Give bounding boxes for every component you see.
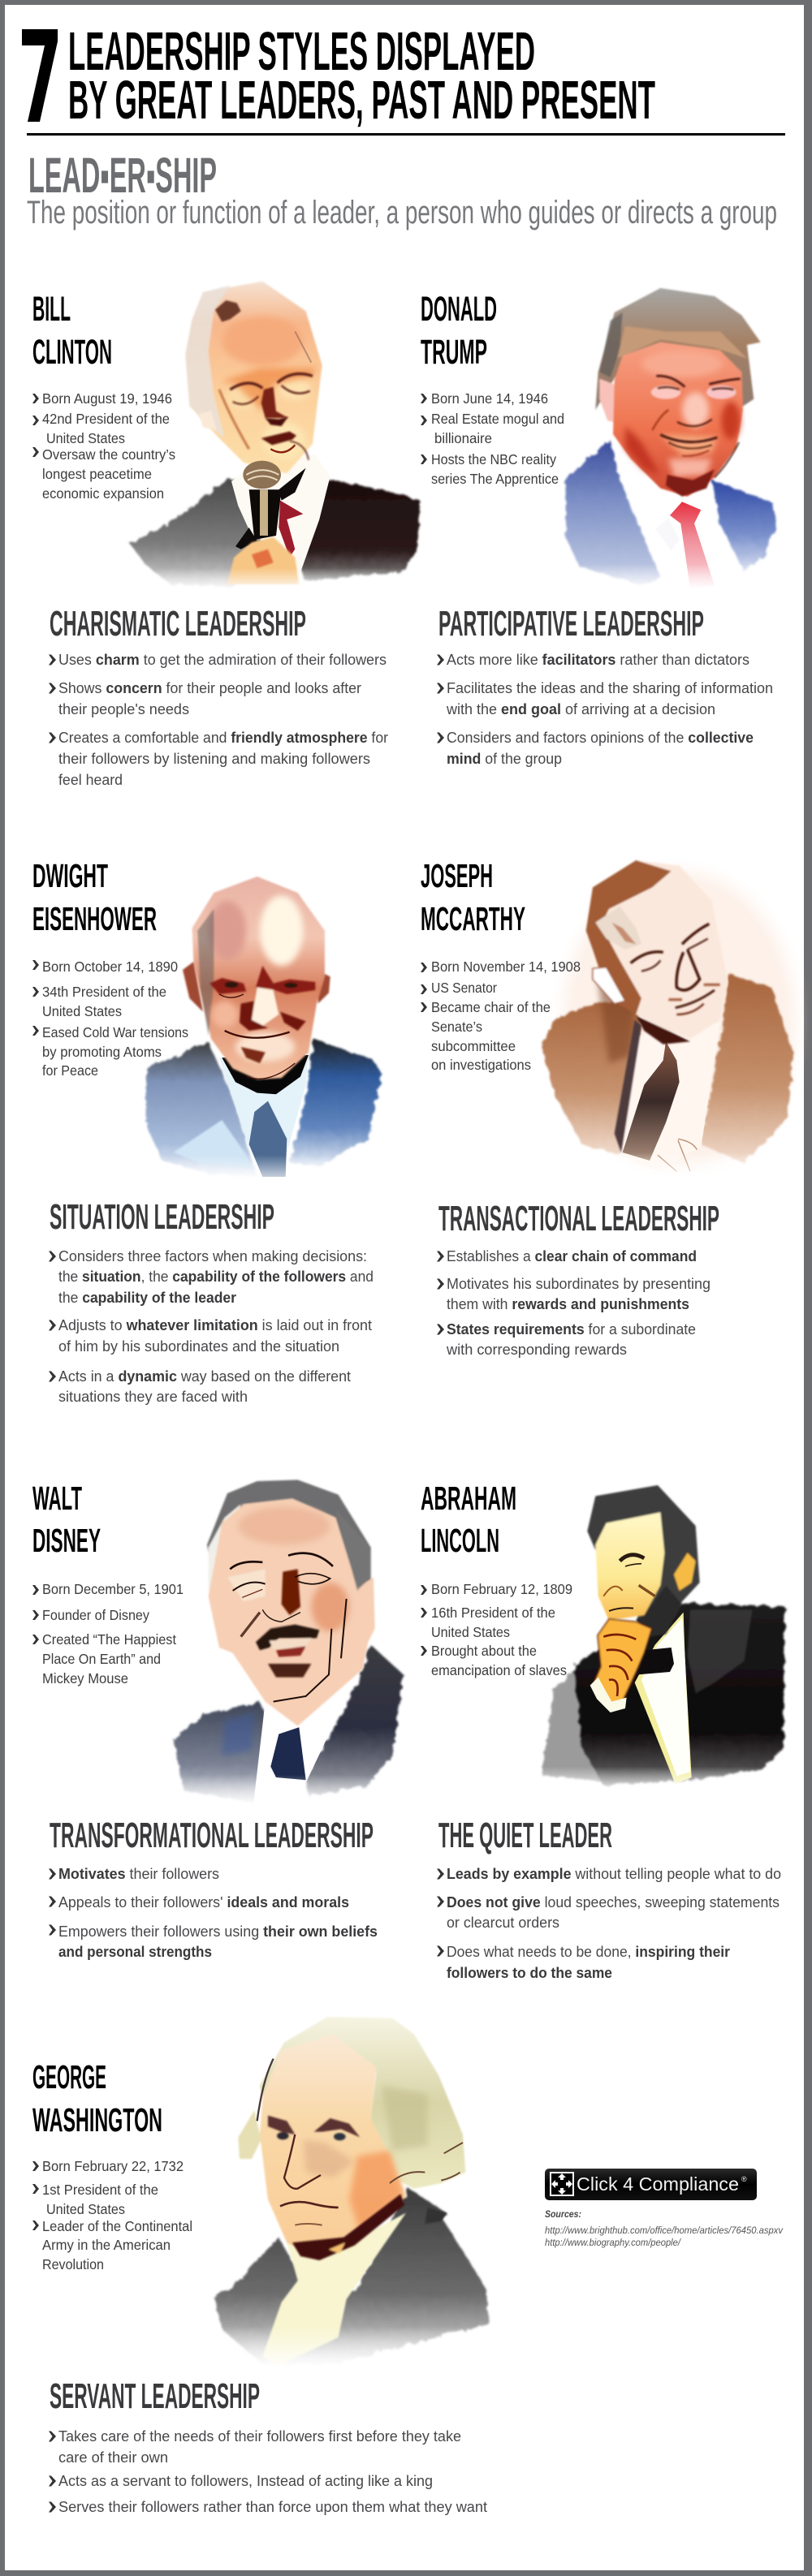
- body: quiet leader: [437, 1866, 781, 1981]
- portrait: Washington: [203, 2017, 503, 2370]
- bio bullets: Hosts the NBC reality: [431, 451, 556, 467]
- bio bullets: Became chair of the: [431, 999, 551, 1015]
- body: transactional: [437, 1248, 710, 1358]
- body: situation: of him by his subordinates and the situation: [58, 1338, 339, 1355]
- bio bullets: billionaire: [434, 430, 492, 446]
- bio bullets: 16th President of the: [431, 1605, 555, 1621]
- portrait: Disney: [162, 1480, 414, 1807]
- logo: Click 4 Compliance: [545, 2169, 757, 2200]
- bio bullets: [32, 1581, 184, 1686]
- body: transformational: and personal strengths: [58, 1944, 212, 1960]
- bio bullets: emancipation of slaves: [431, 1662, 567, 1678]
- body: participative: Acts more like facilitators rather than dictators: [447, 652, 749, 668]
- sources: http://www.brighthub.com/office/home/articles/76450.aspxv: [545, 2225, 784, 2236]
- name: [421, 857, 525, 937]
- bio bullets: [32, 958, 188, 1079]
- body: transformational: Empowers their followers using their own beliefs: [58, 1923, 378, 1940]
- body: situation: [49, 1248, 374, 1405]
- name: JOSEPH: [421, 857, 493, 894]
- big numeral 7: [22, 29, 58, 122]
- name: ABRAHAM: [421, 1480, 516, 1517]
- name: CLINTON: [32, 333, 112, 372]
- name: [32, 290, 112, 372]
- bio bullets: United States: [46, 430, 125, 446]
- bio bullets: [421, 958, 581, 1073]
- name: LINCOLN: [421, 1522, 499, 1559]
- body: transformational: [49, 1866, 378, 1960]
- body: servant: Takes care of the needs of their followers first before they take: [58, 2428, 461, 2445]
- icon: logo mark: [550, 2172, 574, 2196]
- bio bullets: United States: [42, 1003, 122, 1019]
- bio bullets: Army in the American: [42, 2237, 171, 2253]
- body: quiet leader: Does what needs to be done, inspiring their: [447, 1944, 730, 1960]
- bio bullets: series The Apprentice: [431, 471, 559, 487]
- body: transactional: States requirements for a subordinate: [447, 1321, 696, 1338]
- body: quiet leader: or clearcut orders: [447, 1915, 559, 1931]
- body: situation: Considers three factors when making decisions:: [58, 1248, 367, 1264]
- body: transformational: Motivates their followers: [58, 1866, 219, 1882]
- portrait: Lincoln: [528, 1485, 796, 1794]
- bio bullets: Revolution: [42, 2256, 104, 2272]
- bio bullets: Founder of Disney: [42, 1607, 149, 1623]
- body: servant: Serves their followers rather than force upon them what they want: [58, 2499, 487, 2515]
- portrait: Clinton: [122, 282, 430, 592]
- body: charismatic: feel heard: [58, 772, 123, 788]
- body: charismatic: Uses charm to get the admiration of their followers: [58, 652, 387, 668]
- panel: Joseph McCarthy: [421, 857, 804, 1358]
- body: servant: care of their own: [58, 2449, 168, 2466]
- name: [32, 2058, 162, 2139]
- logo: Click 4 Compliance: Click 4 Compliance: [577, 2173, 739, 2195]
- name: [32, 857, 157, 937]
- bio bullets: economic expansion: [42, 485, 164, 502]
- body: participative: with the end goal of arriving at a decision: [446, 701, 715, 717]
- heading: situation: SITUATION LEADERSHIP: [50, 1197, 274, 1237]
- bio bullets: Leader of the Continental: [42, 2218, 192, 2234]
- body: situation: Acts in a dynamic way based on the different: [58, 1368, 351, 1385]
- bio bullets: Born February 22, 1732: [42, 2158, 184, 2174]
- portrait: McCarthy: [528, 860, 804, 1185]
- bio bullets: Born February 12, 1809: [431, 1581, 572, 1597]
- bio bullets: longest peacetime: [42, 466, 152, 482]
- name: DONALD: [421, 290, 497, 329]
- name: GEORGE: [32, 2058, 106, 2096]
- body: transactional: Motivates his subordinates by presenting: [447, 1276, 710, 1292]
- body: quiet leader: Leads by example without telling people what to do: [447, 1866, 781, 1882]
- bio bullets: [32, 2158, 192, 2272]
- heading: quiet leader: THE QUIET LEADER: [438, 1816, 612, 1855]
- title: [22, 21, 655, 131]
- bio bullets: 1st President of the: [42, 2182, 158, 2198]
- name: DISNEY: [32, 1522, 101, 1559]
- bio bullets: Born August 19, 1946: [42, 390, 172, 407]
- name: [32, 1480, 101, 1559]
- body: situation: situations they are faced with: [58, 1389, 248, 1405]
- body: participative: [437, 652, 773, 767]
- body: charismatic: their followers by listening and making followers: [58, 751, 370, 767]
- body: quiet leader: Does not give loud speeches, sweeping statements: [447, 1894, 780, 1910]
- heading: charismatic: CHARISMATIC LEADERSHIP: [50, 604, 306, 644]
- bio bullets: by promoting Atoms: [42, 1044, 162, 1060]
- body: situation: the situation, the capability of the followers and: [58, 1269, 374, 1285]
- bio bullets: for Peace: [42, 1062, 98, 1079]
- body: transactional: with corresponding rewards: [446, 1342, 627, 1358]
- body: charismatic: their people's needs: [58, 701, 189, 717]
- body: participative: Considers and factors opinions of the collective: [447, 730, 754, 746]
- body: quiet leader: followers to do the same: [447, 1965, 612, 1981]
- panel: Walt Disney: [32, 1480, 414, 1960]
- bio bullets: Brought about the: [431, 1643, 537, 1659]
- panel: Dwight Eisenhower: [32, 857, 390, 1405]
- panel: Bill Clinton: [32, 282, 430, 788]
- body: servant: [49, 2428, 487, 2515]
- body: participative: Facilitates the ideas and the sharing of information: [447, 680, 773, 696]
- heading: servant: SERVANT LEADERSHIP: [50, 2376, 260, 2416]
- bio bullets: [32, 390, 175, 502]
- body: situation: the capability of the leader: [58, 1290, 236, 1306]
- body: transactional: them with rewards and punishments: [447, 1296, 689, 1312]
- body: participative: mind of the group: [447, 751, 562, 767]
- sources: Sources:: [545, 2208, 581, 2220]
- definition heading: LEAD▪ER▪SHIP: [28, 148, 217, 203]
- bio bullets: Oversaw the country’s: [42, 446, 175, 463]
- name: EISENHOWER: [32, 900, 157, 937]
- bio bullets: Place On Earth” and: [42, 1651, 161, 1667]
- body: charismatic: [49, 652, 388, 788]
- bio bullets: Born October 14, 1890: [42, 958, 178, 975]
- name: [421, 290, 497, 372]
- body: charismatic: Creates a comfortable and friendly atmosphere for: [58, 730, 388, 746]
- bio bullets: United States: [431, 1624, 510, 1640]
- panel: George Washington: [32, 2017, 503, 2515]
- portrait: Trump: [552, 288, 780, 591]
- bio bullets: Senate’s: [431, 1019, 482, 1035]
- logo: Click 4 Compliance: ®: [741, 2175, 747, 2183]
- body: situation: Adjusts to whatever limitation is laid out in front: [58, 1317, 372, 1333]
- name: WALT: [32, 1480, 82, 1517]
- panel: Abraham Lincoln: [421, 1480, 796, 1981]
- name: DWIGHT: [32, 857, 108, 894]
- bio bullets: Born June 14, 1946: [431, 390, 548, 407]
- name: WASHINGTON: [32, 2101, 162, 2139]
- bio bullets: 34th President of the: [42, 984, 166, 1000]
- heading: transformational: TRANSFORMATIONAL LEADERSHIP: [50, 1816, 374, 1855]
- bio bullets: United States: [46, 2201, 125, 2217]
- name: MCCARTHY: [421, 900, 525, 937]
- panel: Donald Trump: [421, 288, 780, 767]
- bio bullets: Born November 14, 1908: [431, 958, 581, 975]
- bio bullets: 42nd President of the: [42, 411, 170, 427]
- bio bullets: US Senator: [431, 980, 497, 996]
- bio bullets: Real Estate mogul and: [431, 411, 564, 427]
- body: servant: Acts as a servant to followers, Instead of acting like a king: [58, 2473, 433, 2489]
- name: TRUMP: [421, 333, 487, 372]
- bio bullets: Created “The Happiest: [42, 1631, 176, 1648]
- bio bullets: subcommittee: [431, 1038, 516, 1054]
- bio bullets: Mickey Mouse: [42, 1670, 128, 1686]
- bio bullets: on investigations: [431, 1057, 531, 1073]
- sources: [545, 2208, 784, 2248]
- name: BILL: [32, 290, 71, 329]
- name: [421, 1480, 516, 1559]
- body: transformational: Appeals to their followers' ideals and morals: [58, 1894, 349, 1910]
- bio bullets: Eased Cold War tensions: [42, 1024, 188, 1040]
- bio bullets: [421, 390, 564, 487]
- sources: http://www.biography.com/people/: [545, 2237, 682, 2248]
- bio bullets: Born December 5, 1901: [42, 1581, 184, 1597]
- body: charismatic: Shows concern for their people and looks after: [58, 680, 361, 696]
- portrait: Eisenhower: [130, 877, 390, 1187]
- bio bullets: [421, 1581, 572, 1678]
- body: transactional: Establishes a clear chain of command: [447, 1248, 697, 1264]
